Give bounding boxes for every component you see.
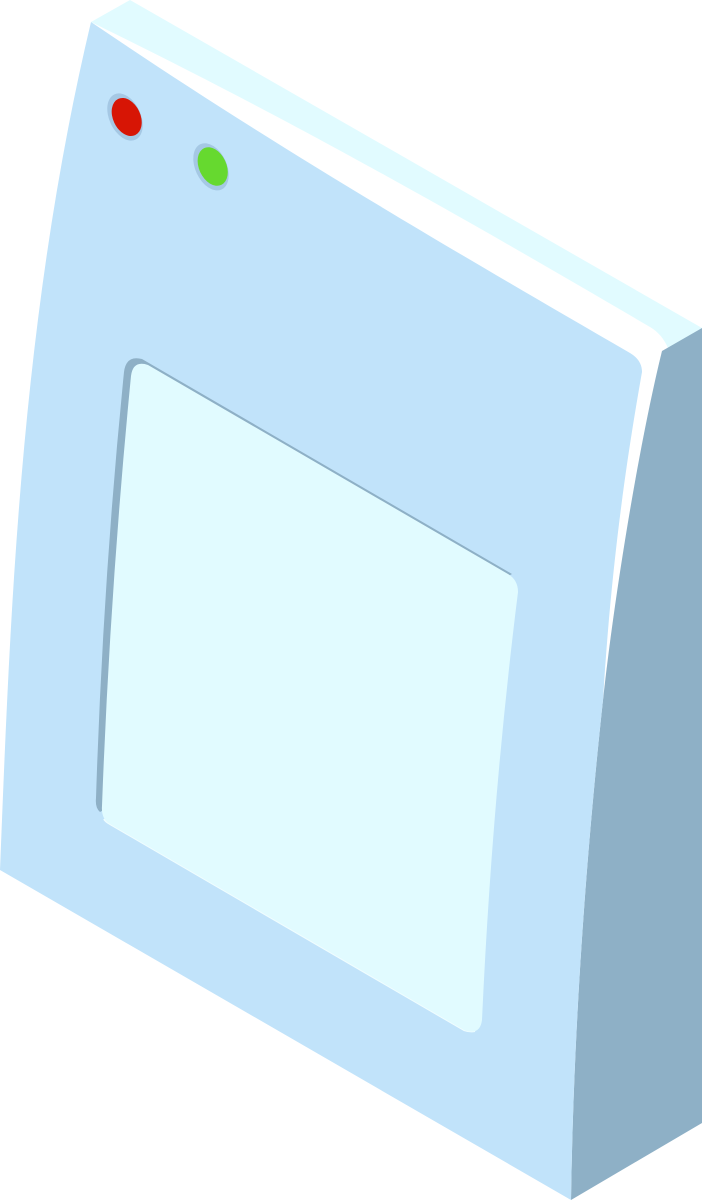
side face of device: [571, 328, 702, 1200]
screen lower-left white rim: [104, 819, 475, 1031]
green indicator light: [186, 138, 236, 196]
top face of device: [91, 0, 702, 348]
screen panel: [102, 364, 518, 1032]
red indicator light: [100, 88, 150, 146]
screen recess shadow: [96, 358, 512, 812]
